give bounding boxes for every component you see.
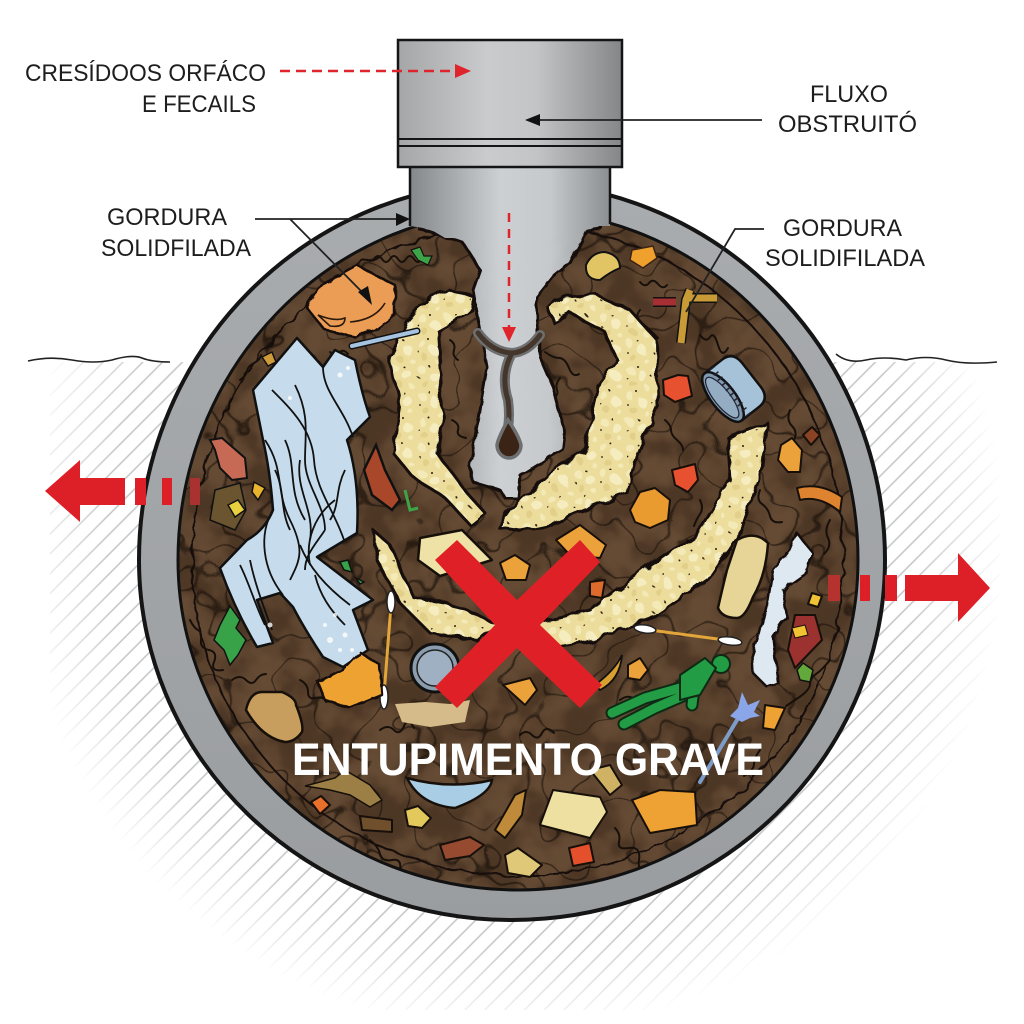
debris: green scrap xyxy=(411,247,432,265)
label: obstructed flow: OBSTRUITÓ xyxy=(778,111,917,138)
debris: cotton swab horizontal xyxy=(634,624,742,647)
left grease pointer arrows xyxy=(255,213,410,305)
upper pipe collar xyxy=(398,40,622,167)
debris: orange grease lump xyxy=(306,265,395,337)
fat band left xyxy=(390,288,485,525)
debris: green scraps xyxy=(214,490,813,682)
debris: blue stick fill xyxy=(352,331,417,346)
debris: chicken bone xyxy=(210,438,247,480)
contour-like sediment texture xyxy=(170,200,870,900)
mottled sediment tones xyxy=(170,200,870,900)
debris: orange pentagon xyxy=(630,246,657,268)
sediment mass xyxy=(170,200,870,900)
fat oblong xyxy=(718,536,768,618)
debris: beige paper xyxy=(395,700,470,727)
label: grease left xyxy=(101,204,251,262)
flow obstructed arrow xyxy=(525,114,762,126)
white grease streak xyxy=(752,533,812,687)
debris: lower scraps xyxy=(311,593,822,877)
debris: cotton swab vertical xyxy=(380,591,395,709)
debris: metal lid xyxy=(411,644,459,692)
label: obstructed flow: FLUXO xyxy=(810,81,888,108)
debris: orange sponge xyxy=(318,652,382,708)
lower pipe side edges xyxy=(410,166,610,226)
outer pipe ring xyxy=(139,182,885,920)
fat band lower arc xyxy=(500,422,767,648)
label: grease right xyxy=(765,215,925,272)
debris: tan blob xyxy=(246,692,302,742)
debris: yellow chunk top xyxy=(586,252,620,280)
label: grease right: SOLIDIFILADA xyxy=(765,245,925,272)
debris: blue stick xyxy=(352,331,417,346)
red dashed label arrow: residues xyxy=(280,64,471,78)
fat band right xyxy=(498,295,658,530)
wavy inner rim xyxy=(192,224,844,876)
label: grease right: GORDURA xyxy=(783,215,902,242)
label: grease left: SOLIDFILADA xyxy=(101,235,251,262)
inner ring edge xyxy=(178,210,858,890)
red dashed flow arrow down xyxy=(502,213,516,342)
debris: red bowl shard xyxy=(364,445,400,510)
debris: banana peel xyxy=(595,655,622,690)
debris: mixed scraps left xyxy=(210,352,276,530)
lower pipe xyxy=(410,166,610,238)
fat lump behind cross xyxy=(418,530,492,576)
right grease pointer line xyxy=(686,229,764,312)
label: grease left: GORDURA xyxy=(107,204,227,231)
debris: dry leaves xyxy=(305,770,382,807)
red leak arrow right xyxy=(828,553,990,622)
debris: straw bundle xyxy=(653,290,717,343)
label: residues xyxy=(25,60,266,118)
central gray opening xyxy=(420,215,600,498)
wet wipes xyxy=(220,338,373,667)
sediment squiggles xyxy=(190,256,830,870)
ground surface line right xyxy=(836,354,997,363)
wastewater drip xyxy=(478,333,540,458)
title: severe clog: ENTUPIMENTO GRAVE xyxy=(292,734,764,785)
debris: blue burst and stick xyxy=(700,692,760,782)
ground hatching xyxy=(50,362,1000,1010)
red cross xyxy=(435,540,602,708)
debris: bottle cap xyxy=(695,351,770,428)
debris: toy soldier xyxy=(612,655,730,724)
debris: blue dish xyxy=(407,778,492,808)
label: obstructed flow xyxy=(778,81,917,138)
label: residues: CRESÍDOOS ORFÁCO xyxy=(25,60,266,87)
debris: red and orange scraps xyxy=(500,375,842,705)
debris: orange lump details xyxy=(318,303,385,326)
red leak arrow left xyxy=(45,460,200,522)
label: residues: E FECAILS xyxy=(142,91,256,118)
fat band lower left xyxy=(373,530,497,640)
ground surface line left xyxy=(28,356,170,362)
